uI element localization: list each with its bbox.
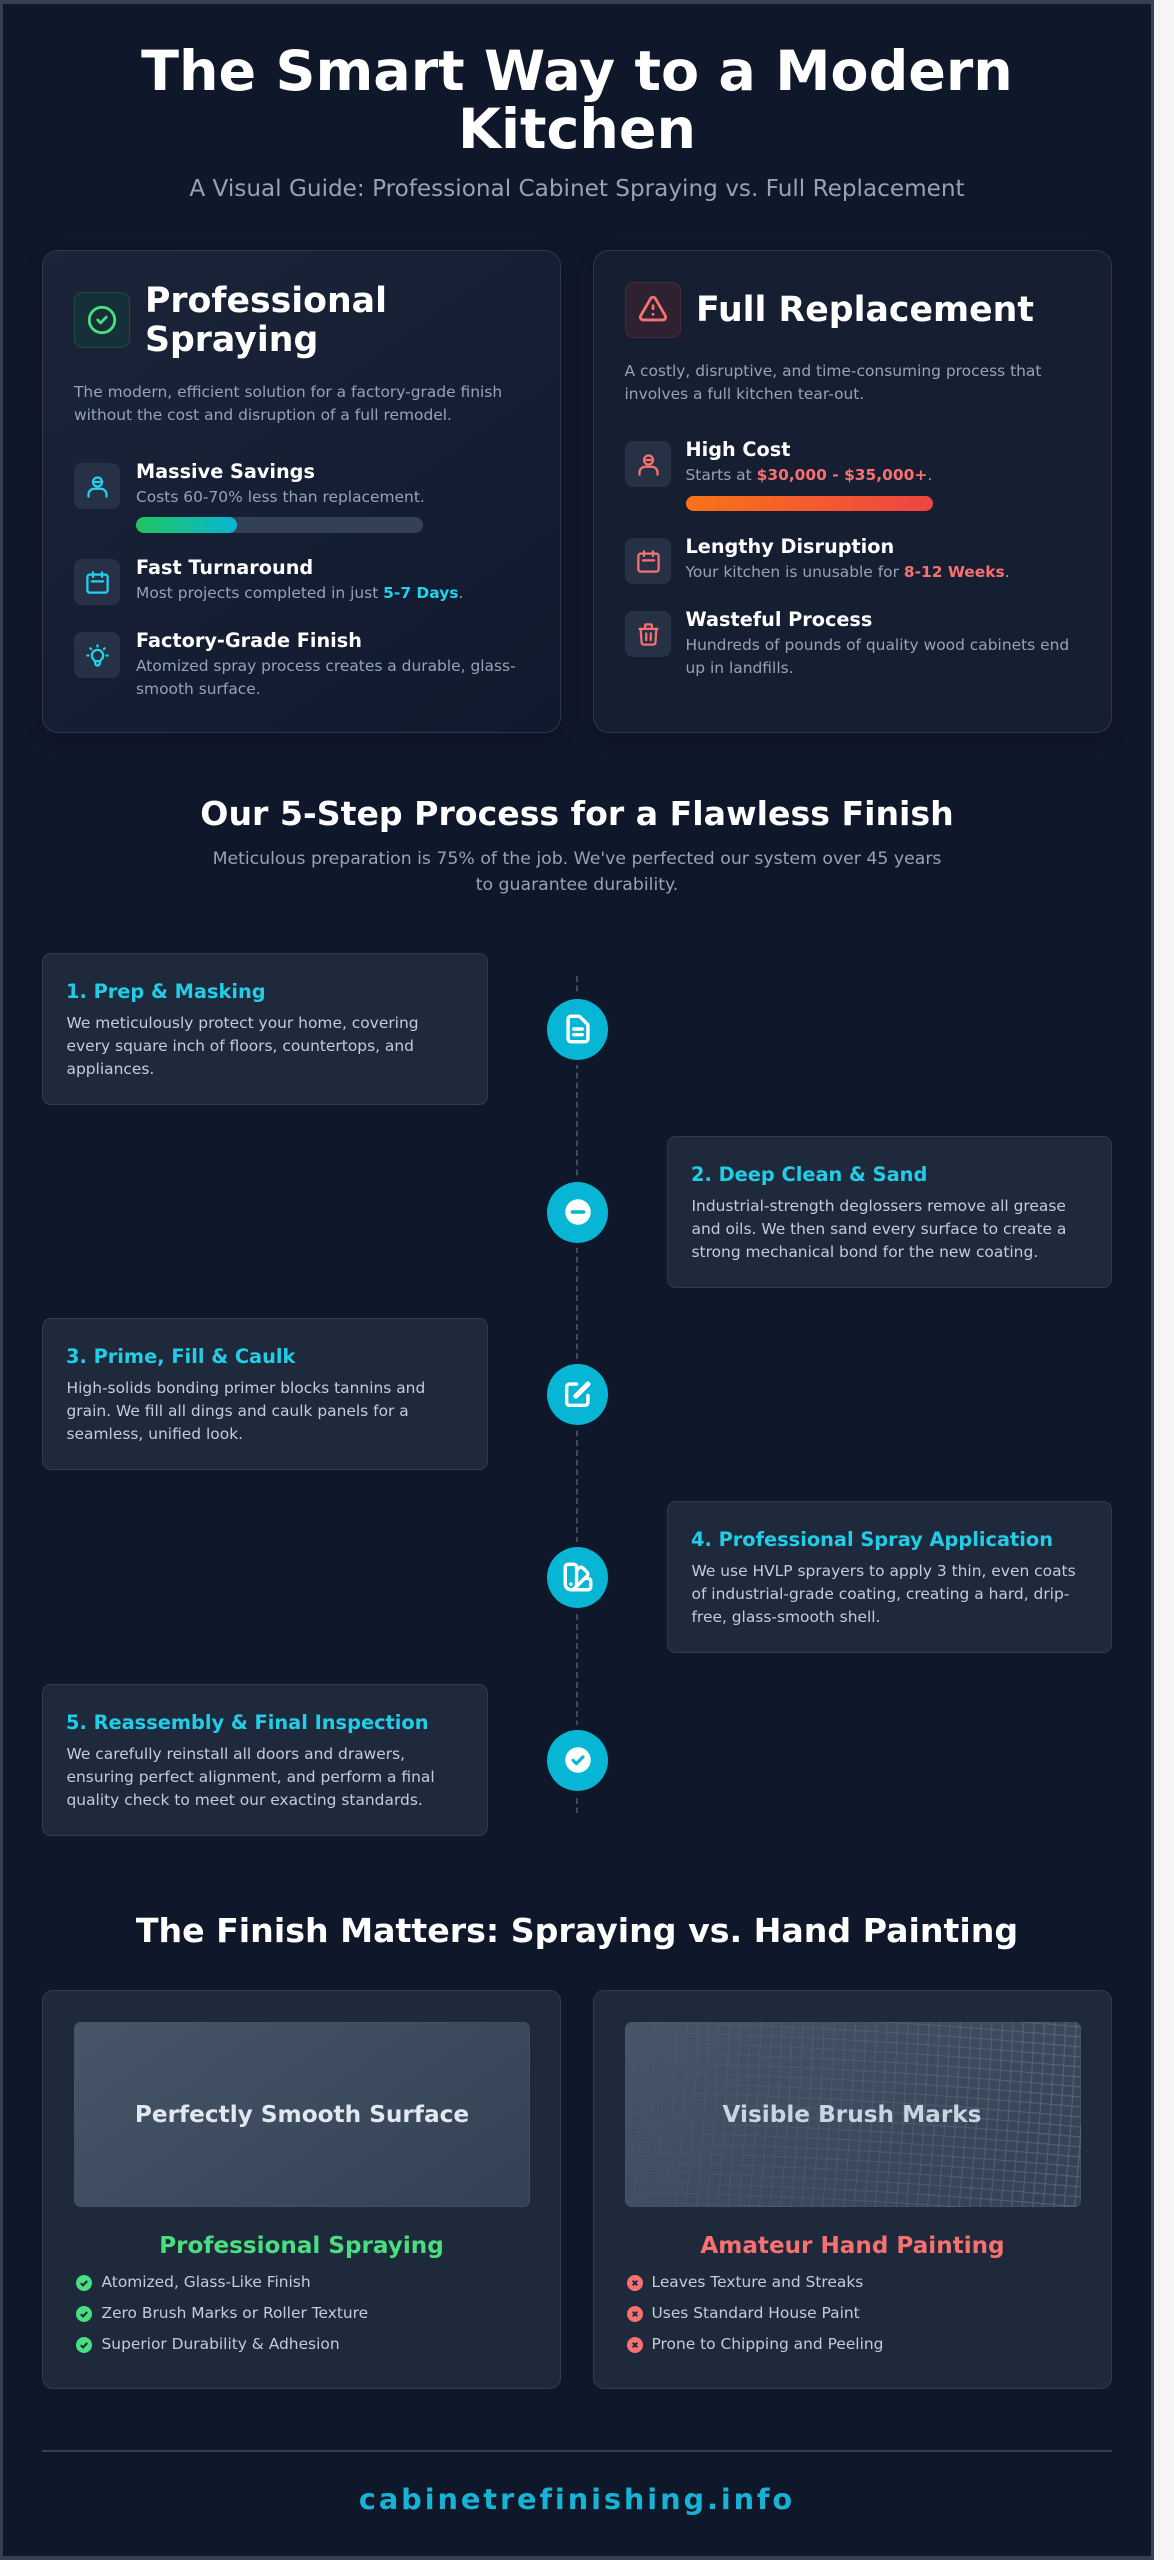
icon: calendar — [625, 538, 671, 584]
step title: 3. Prime, Fill & Caulk — [66, 1344, 295, 1368]
footer website: cabinetrefinishing.info — [359, 2482, 795, 2516]
heading: professional spraying — [145, 281, 387, 360]
text: Costs 60-70% less than replacement. — [136, 488, 425, 506]
description: involves a full kitchen tear-out. — [624, 385, 864, 403]
text: Most projects completed in just 5-7 Days. — [136, 584, 463, 602]
step text: of industrial-grade coating, creating a hard, drip- — [692, 1584, 1069, 1602]
step text: strong mechanical bond for the new coating. — [692, 1242, 1038, 1260]
feature: factory-grade finish — [74, 629, 516, 698]
feature: massive savings — [74, 460, 425, 533]
feature: lengthy disruption — [625, 535, 1010, 584]
list item: Uses Standard House Paint — [652, 2304, 860, 2322]
label: Wasteful Process — [686, 608, 872, 631]
heading: professional spraying: Spraying — [145, 320, 318, 360]
step text: seamless, unified look. — [66, 1424, 243, 1442]
step 3 card — [42, 1318, 488, 1470]
text: Starts at $30,000 - $35,000+. — [686, 466, 932, 484]
icon: step 5 check circle — [547, 1730, 608, 1790]
list item: Leaves Texture and Streaks — [652, 2273, 863, 2291]
list item: Zero Brush Marks or Roller Texture — [102, 2304, 368, 2322]
step text — [66, 1014, 419, 1078]
swatch label: Perfectly Smooth Surface — [135, 2101, 469, 2128]
label: High Cost — [686, 438, 790, 461]
description: The modern, efficient solution for a factory-grade finish — [74, 383, 502, 401]
text: smooth surface. — [136, 680, 261, 698]
step text: free, glass-smooth shell. — [692, 1608, 880, 1626]
icon: calendar — [74, 559, 120, 605]
label: Massive Savings — [136, 460, 315, 483]
list item: Prone to Chipping and Peeling — [652, 2335, 883, 2353]
step text: We carefully reinstall all doors and drawers, — [66, 1744, 405, 1762]
step text: every square inch of floors, countertops, and — [66, 1036, 414, 1054]
title: Kitchen — [458, 97, 696, 162]
step text: We use HVLP sprayers to apply 3 thin, even coats — [692, 1562, 1076, 1580]
step title: 4. Professional Spray Application — [691, 1528, 1053, 1550]
step text: ensuring perfect alignment, and perform a final — [66, 1768, 435, 1786]
cost bar — [686, 496, 933, 511]
feature: high cost — [625, 438, 933, 511]
description — [624, 362, 1042, 403]
step title: 5. Reassembly & Final Inspection — [66, 1710, 429, 1734]
section heading: process: Our 5-Step Process for a Flawless Finish — [200, 794, 954, 833]
description — [74, 383, 502, 424]
step title: 1. Prep & Masking — [66, 980, 266, 1002]
heading: full replacement: Full Replacement — [696, 290, 1034, 330]
label: Factory-Grade Finish — [136, 629, 362, 652]
step 2 card — [667, 1136, 1112, 1288]
subtitle: A Visual Guide: Professional Cabinet Spraying vs. Full Replacement — [189, 176, 965, 202]
icon: step 1 document — [547, 998, 608, 1060]
icon: trash — [625, 611, 671, 657]
text: Your kitchen is unusable for 8-12 Weeks. — [686, 563, 1010, 581]
step text: High-solids bonding primer blocks tannins and — [66, 1378, 425, 1396]
panel: spraying finish — [42, 1990, 561, 2389]
feature: wasteful process — [625, 608, 1069, 677]
icon: person cost — [625, 441, 671, 487]
text — [686, 636, 1069, 677]
icon: person savings — [74, 463, 120, 509]
comparison heading: Amateur Hand Painting — [700, 2233, 1005, 2259]
text: up in landfills. — [686, 659, 794, 677]
title — [141, 39, 1013, 162]
step text: We meticulously protect your home, covering — [66, 1014, 419, 1032]
swatch label: Visible Brush Marks — [723, 2101, 981, 2128]
panel: professional spraying — [42, 250, 561, 733]
icon: check circle — [74, 292, 130, 348]
smooth surface swatch — [74, 2022, 530, 2207]
comparison heading: Professional Spraying — [159, 2233, 444, 2259]
step text: appliances. — [66, 1060, 154, 1078]
title: The Smart Way to a Modern — [141, 39, 1013, 104]
timeline line — [576, 976, 578, 1813]
step text — [66, 1378, 425, 1442]
step text: Industrial-strength deglossers remove all grease — [692, 1196, 1066, 1214]
step text — [66, 1744, 435, 1808]
feature: fast turnaround — [74, 556, 463, 605]
text — [136, 657, 516, 698]
brush marks swatch — [625, 2022, 1081, 2207]
step text: grain. We fill all dings and caulk panels for a — [66, 1402, 409, 1420]
list item: Superior Durability & Adhesion — [102, 2335, 340, 2353]
section intro — [213, 849, 941, 895]
icon: step 2 minus circle — [547, 1182, 608, 1242]
step text: and oils. We then sand every surface to create a — [692, 1220, 1066, 1238]
section intro: Meticulous preparation is 75% of the job. We've perfected our system over 45 years — [213, 849, 941, 869]
step text: quality check to meet our exacting standards. — [66, 1790, 423, 1808]
description: without the cost and disruption of a full remodel. — [74, 406, 452, 424]
heading: professional spraying: Professional — [145, 281, 387, 321]
step text — [692, 1562, 1076, 1626]
step 1 card — [42, 953, 488, 1105]
icon: warning triangle — [625, 282, 681, 338]
step 5 card — [42, 1684, 488, 1836]
section intro: to guarantee durability. — [476, 875, 678, 895]
list item: Atomized, Glass-Like Finish — [102, 2273, 311, 2291]
panel: hand painting finish — [593, 1990, 1112, 2389]
section heading: finish: The Finish Matters: Spraying vs. Hand Painting — [136, 1911, 1018, 1950]
description: A costly, disruptive, and time-consuming process that — [624, 362, 1041, 380]
label: Lengthy Disruption — [686, 535, 894, 558]
icon: step 3 pencil — [547, 1364, 608, 1424]
label: Fast Turnaround — [136, 556, 313, 579]
step text — [692, 1196, 1066, 1260]
text: Hundreds of pounds of quality wood cabinets end — [686, 636, 1069, 654]
step 4 card — [667, 1501, 1112, 1653]
text: Atomized spray process creates a durable, glass- — [136, 657, 516, 675]
panel: full replacement — [593, 250, 1112, 733]
icon: light bulb — [74, 632, 120, 678]
step title: 2. Deep Clean & Sand — [691, 1162, 927, 1186]
icon: step 4 swatch — [547, 1546, 608, 1608]
savings bar — [136, 517, 423, 533]
